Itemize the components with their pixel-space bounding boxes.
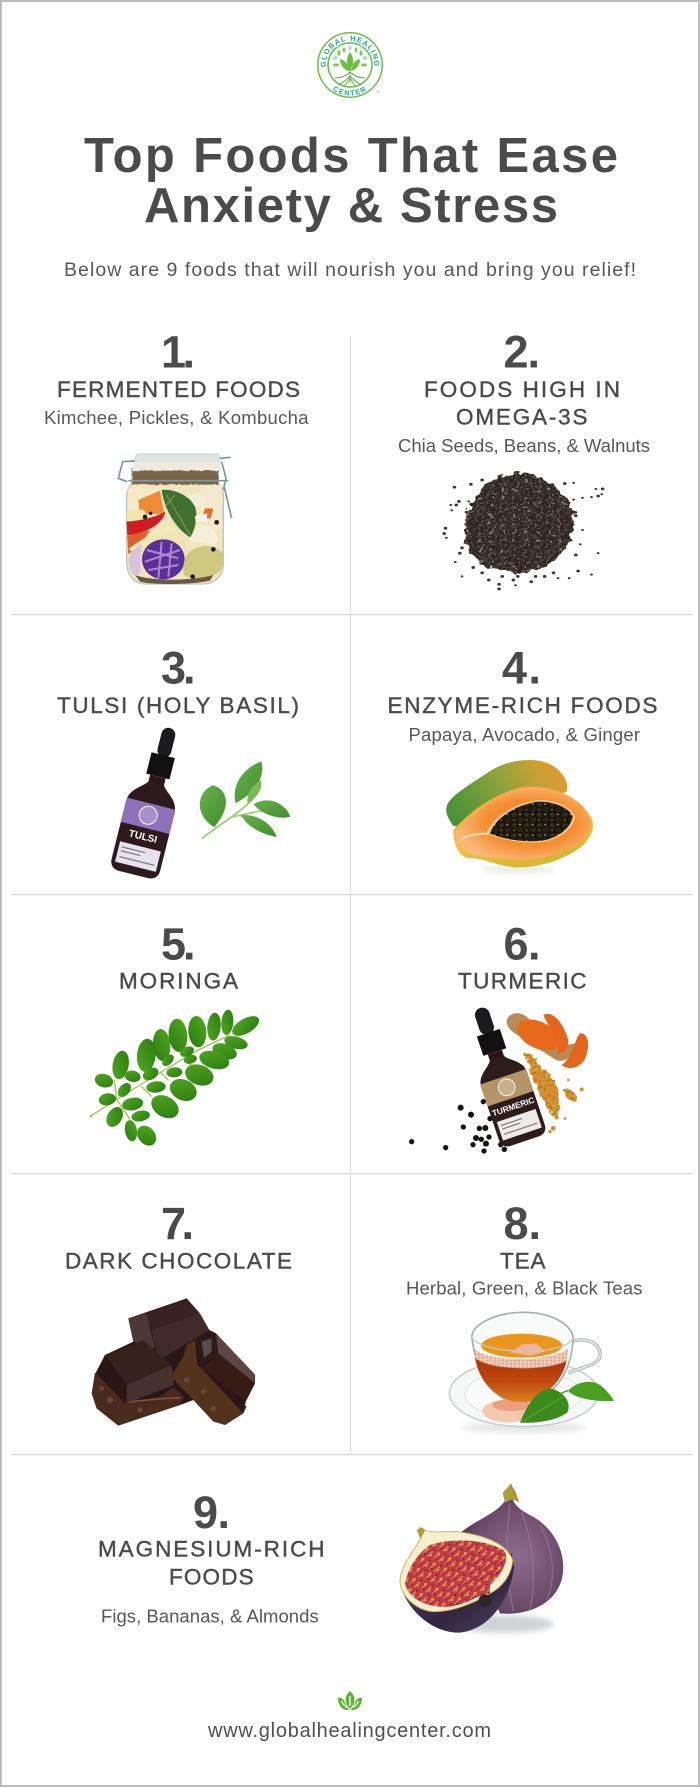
number 4: 4. [502, 643, 541, 694]
number 6: 6. [504, 919, 540, 970]
number 2: 2. [504, 326, 540, 378]
heading: FOODS [169, 1564, 254, 1589]
number 3: 3. [161, 643, 196, 694]
logo: Global Healing Center: ® [376, 89, 380, 94]
panel: 7 dark chocolate [65, 1198, 292, 1426]
image: moringa leaves [90, 1009, 262, 1149]
image: tea cup [449, 1312, 614, 1432]
image: tulsi bottle [109, 722, 194, 881]
heading [424, 377, 620, 430]
icon: footer leaf [338, 1691, 362, 1710]
image: fermented vegetable jar [118, 454, 232, 584]
description: Chia Seeds, Beans, & Walnuts [398, 435, 650, 456]
heading: MAGNESIUM-RICH [98, 1537, 324, 1562]
number 8: 8. [504, 1198, 541, 1249]
heading: TULSI (HOLY BASIL) [57, 693, 299, 718]
panel: 2 omega-3s [398, 326, 650, 590]
number 5: 5. [161, 919, 196, 970]
number 9: 9. [193, 1487, 230, 1538]
heading: TURMERIC [458, 969, 586, 994]
logo: Global Healing Center: CENTER [334, 86, 366, 96]
panel: 3 tulsi [57, 643, 299, 881]
image: chia seeds [442, 473, 604, 590]
panel: 4 enzyme-rich foods [388, 643, 658, 873]
heading: DARK CHOCOLATE [65, 1249, 292, 1274]
description: Papaya, Avocado, & Ginger [408, 724, 640, 745]
panel: 8 tea [406, 1198, 642, 1432]
number 1: 1. [161, 326, 195, 378]
image: turmeric bottle [457, 1000, 548, 1149]
panel: 5 moringa [90, 919, 262, 1149]
heading [98, 1537, 324, 1589]
number 7: 7. [161, 1198, 194, 1249]
description: Kimchee, Pickles, & Kombucha [44, 407, 309, 428]
panel: 9 magnesium-rich foods [98, 1484, 563, 1633]
heading: FERMENTED FOODS [57, 377, 300, 402]
logo: Global Healing Center [317, 32, 383, 98]
subtitle: Below are 9 foods that will nourish you and bring you relief! [64, 259, 636, 281]
image: tulsi bottle: TULSI [127, 828, 158, 846]
heading: OMEGA-3S [456, 405, 588, 430]
heading: TEA [500, 1249, 546, 1274]
website url: www.globalhealingcenter.com [207, 1720, 491, 1742]
image: figs [400, 1484, 563, 1633]
image: dark chocolate [92, 1298, 255, 1426]
image: turmeric bottle: TURMERIC [491, 1095, 536, 1118]
description: Figs, Bananas, & Almonds [101, 1606, 319, 1627]
title: Anxiety & Stress [144, 179, 558, 233]
heading: FOODS HIGH IN [424, 377, 620, 402]
image: basil sprig [200, 761, 290, 839]
panel: 6 turmeric [409, 919, 588, 1154]
panel: 1 fermented foods [44, 326, 309, 584]
heading: MORINGA [119, 969, 238, 994]
heading: ENZYME-RICH FOODS [388, 693, 658, 718]
title [84, 129, 618, 233]
title: Top Foods That Ease [84, 129, 618, 183]
image: turmeric root, powder and peppercorns [409, 1013, 588, 1154]
description: Herbal, Green, & Black Teas [406, 1278, 642, 1299]
image: papaya [446, 760, 593, 873]
logo: Global Healing Center: GLOBAL HEALING [320, 36, 380, 67]
